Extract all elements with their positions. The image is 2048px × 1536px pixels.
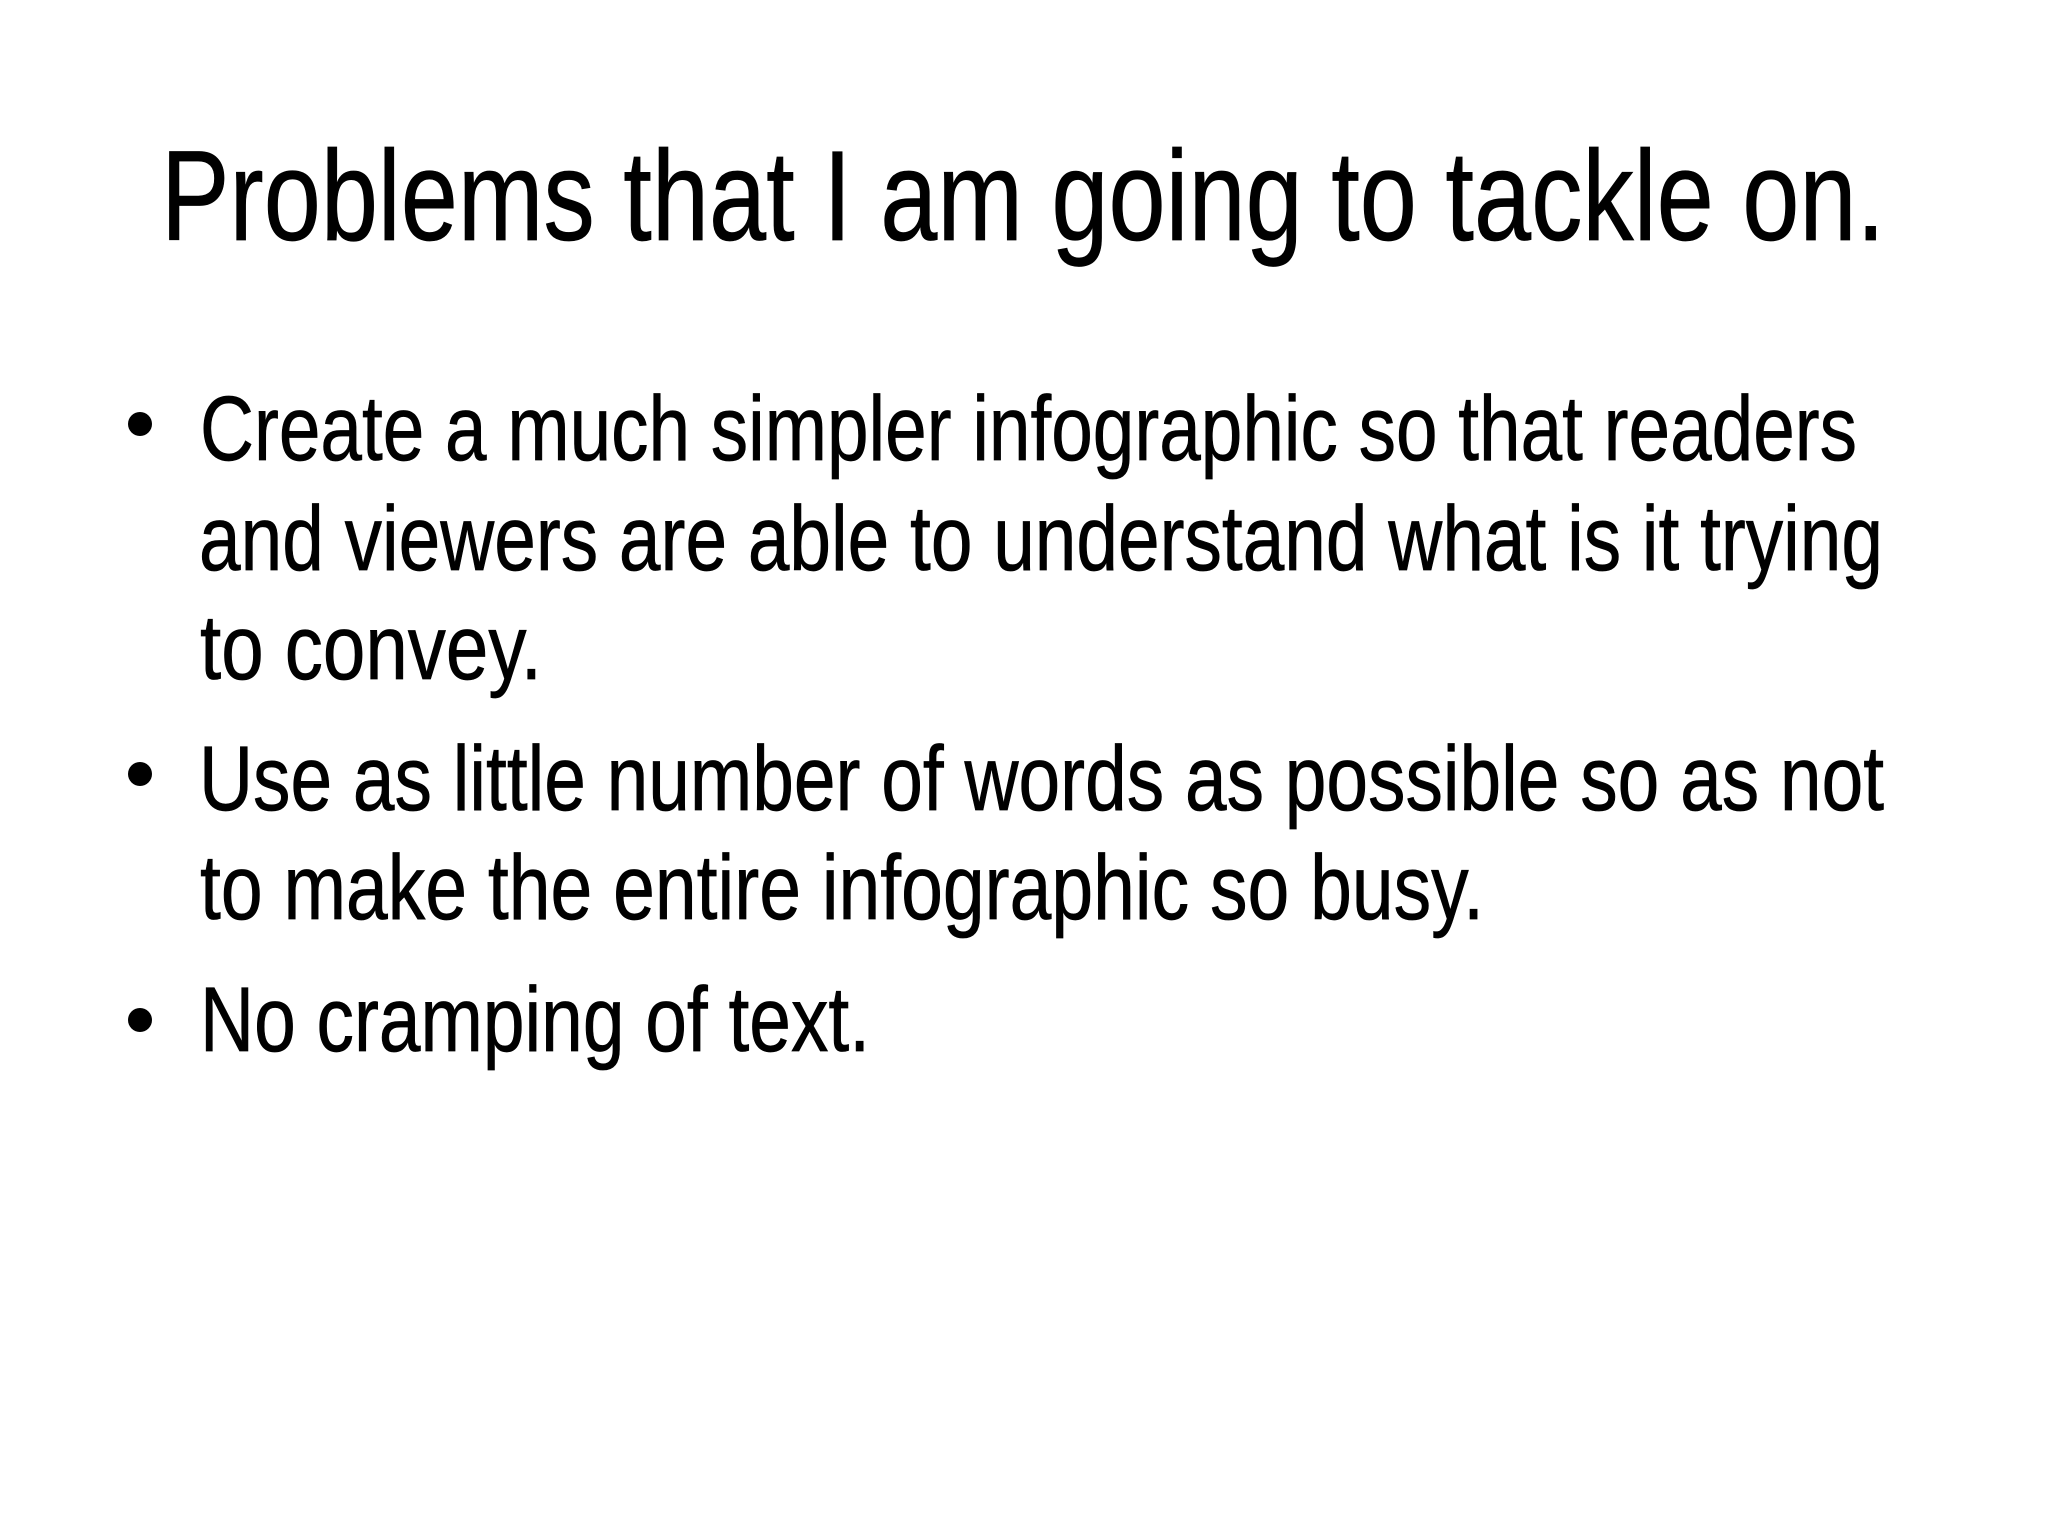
text block: bullet 3: No cramping of text. [200, 969, 870, 1071]
icon: bullet dot 2 [128, 762, 152, 786]
text block: bullet 2 [199, 728, 1884, 939]
text block: bullet 2: to make the entire infographic so busy. [200, 837, 1484, 939]
bullet list [128, 378, 1884, 1071]
bullet item 1 [128, 378, 1883, 699]
text block: bullet 1 [199, 378, 1883, 699]
text block: bullet 1: to convey. [200, 597, 542, 699]
icon: bullet dot 1 [128, 412, 152, 436]
bullet item 2 [128, 728, 1884, 939]
icon: bullet dot 3 [128, 1008, 152, 1032]
bullet item 3 [128, 969, 870, 1071]
